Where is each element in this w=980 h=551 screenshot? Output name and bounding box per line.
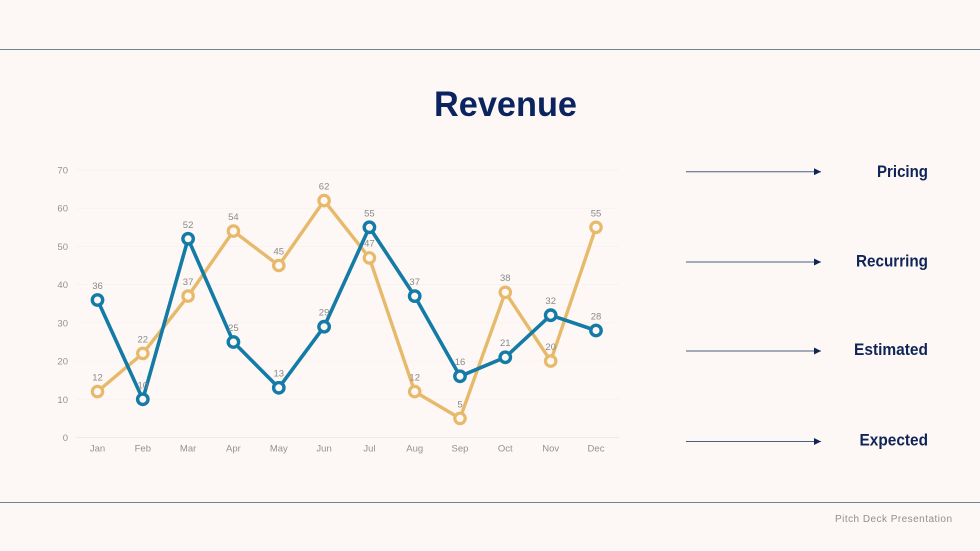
- x axis labels: Jan: [90, 444, 105, 454]
- legend row: Expected: Expected: [860, 432, 928, 450]
- series: gold line: 54: [228, 212, 239, 223]
- y axis labels: 60: [57, 204, 68, 215]
- series: blue line: 37: [409, 277, 420, 288]
- series: blue line: 28: [591, 312, 601, 322]
- series: gold line: 20: [545, 342, 556, 353]
- series: gold line: 12: [409, 372, 420, 384]
- y axis labels: 70: [57, 166, 68, 176]
- y axis labels: 0: [63, 433, 68, 444]
- legend row: Estimated: Estimated: [854, 341, 928, 359]
- series: blue line: 16: [455, 357, 465, 368]
- series: blue line: 21: [500, 338, 511, 349]
- series: blue line: 10: [138, 380, 148, 392]
- series: gold line: 38: [500, 273, 511, 284]
- arrow: Recurring: [686, 261, 821, 263]
- series: blue line: [92, 208, 601, 404]
- y axis labels: 40: [57, 280, 68, 291]
- arrow: Estimated: [686, 350, 821, 352]
- series: gold line: 37: [183, 277, 193, 288]
- x axis labels: Apr: [226, 444, 241, 454]
- series: blue line: 52: [183, 220, 193, 231]
- x axis labels: Jun: [316, 444, 332, 454]
- x axis labels: Dec: [588, 444, 605, 454]
- series: blue line: 32: [545, 296, 556, 307]
- series: gold line: 62: [319, 182, 329, 192]
- legend row: Recurring: Recurring: [856, 252, 928, 270]
- series: blue line: 36: [92, 281, 103, 292]
- y axis labels: 20: [57, 357, 68, 368]
- series: blue line: 29: [319, 308, 329, 318]
- legend row: Pricing: Pricing: [877, 163, 928, 181]
- series: blue line: 55: [364, 208, 375, 220]
- y axis labels: 30: [57, 318, 68, 329]
- y axis labels: [57, 166, 68, 444]
- y axis labels: 10: [57, 395, 68, 406]
- series: blue line: 25: [228, 323, 239, 334]
- x axis labels: Jul: [363, 444, 375, 454]
- line chart: monthly revenue: [57, 166, 619, 454]
- series: gold line: 22: [138, 334, 148, 346]
- series: gold line: 12: [92, 372, 103, 384]
- y axis labels: 50: [57, 242, 68, 253]
- series: gold line: [92, 182, 601, 424]
- series: gold line: 47: [364, 238, 375, 250]
- x axis labels: May: [270, 444, 288, 454]
- x axis labels: [90, 444, 605, 454]
- x axis labels: Mar: [180, 444, 196, 454]
- arrow: Expected: [686, 440, 821, 442]
- series: gold line: 55: [591, 208, 601, 220]
- x axis labels: Aug: [406, 444, 423, 454]
- x axis labels: Feb: [135, 444, 151, 454]
- series: gold line: 5: [457, 400, 463, 410]
- title: Revenue: [434, 85, 577, 124]
- x axis labels: Nov: [542, 444, 559, 454]
- x axis labels: Sep: [452, 444, 468, 454]
- chart gridlines: [76, 170, 619, 438]
- series: blue line: 13: [274, 368, 284, 380]
- arrow: Pricing: [686, 171, 821, 173]
- footer text: Pitch Deck Presentation: [835, 514, 952, 525]
- series: gold line: 45: [274, 246, 284, 258]
- x axis labels: Oct: [498, 444, 513, 454]
